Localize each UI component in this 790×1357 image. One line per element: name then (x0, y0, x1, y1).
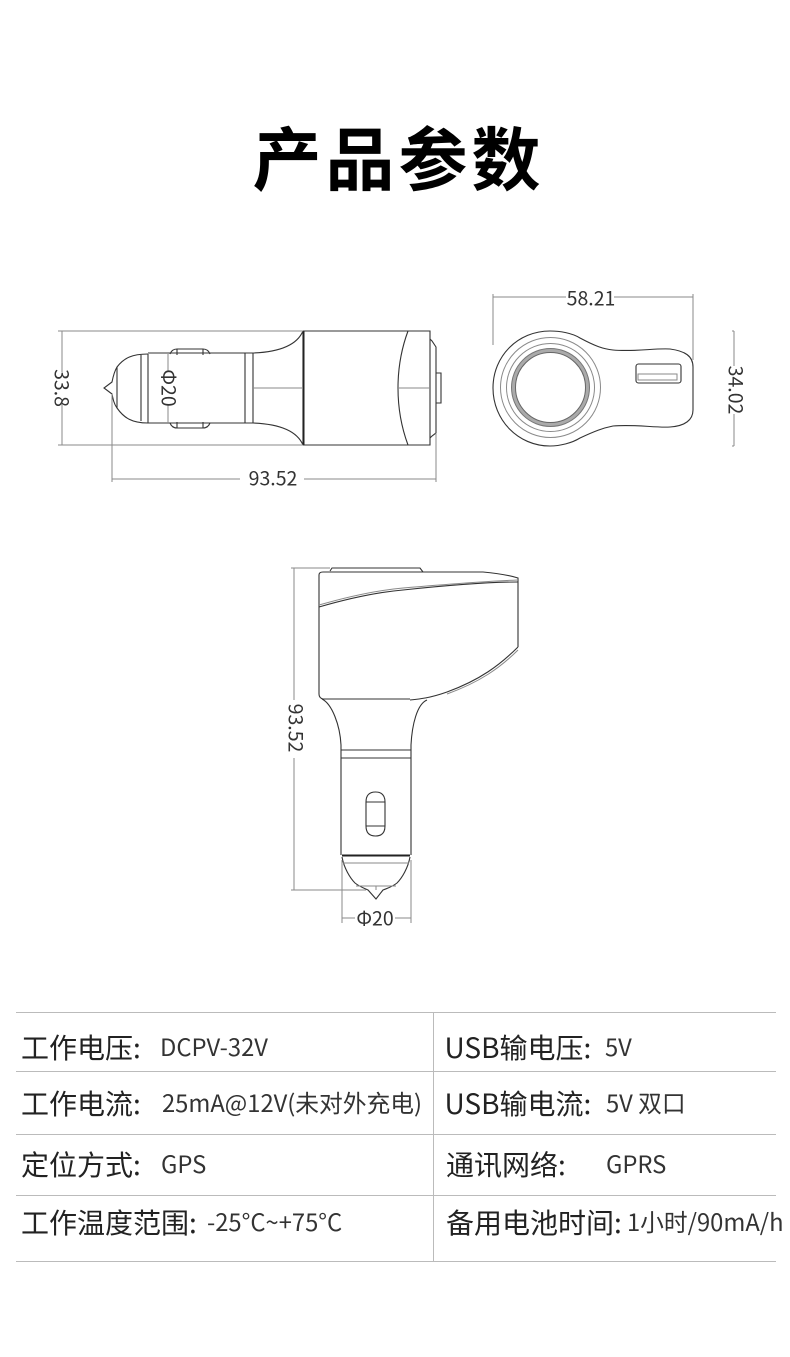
dimension label: height: 33.8 (48, 369, 78, 407)
spec: USB output current: 5V 双口 (606, 1084, 686, 1119)
spec: USB output current (444, 1083, 686, 1123)
spec: positioning method: GPS (161, 1145, 206, 1180)
spec: working current (21, 1083, 422, 1123)
spec: working current: 25mA@12V(未对外充电) (162, 1084, 422, 1119)
spec: working voltage: DCPV-32V (160, 1028, 268, 1063)
spec: backup battery time: 1小时/90mA/h (627, 1203, 784, 1238)
spec: USB output voltage: USB输电压: (444, 1027, 591, 1067)
top view diagram (493, 282, 752, 446)
top view dimension lines (493, 294, 734, 446)
spec: positioning method (21, 1144, 206, 1184)
dimension label: width: 58.21 (567, 282, 615, 312)
spec: USB output voltage: 5V (605, 1028, 632, 1063)
spec: working voltage: 工作电压: (21, 1027, 141, 1067)
front view outline (319, 568, 518, 899)
dimension label: diameter: Φ20 (156, 369, 184, 407)
side view dimension lines (58, 331, 436, 482)
spec: working temperature range (21, 1202, 342, 1242)
front view diagram (282, 568, 518, 932)
specification table (16, 1012, 784, 1262)
spec: communication network (446, 1144, 666, 1184)
top view outline (493, 331, 693, 446)
dimension label: diameter: Φ20 (356, 902, 394, 932)
side view outline (104, 331, 441, 445)
dimension label: length: 93.52 (249, 462, 297, 492)
front view dimension lines (291, 568, 411, 923)
spec: USB output current: USB输电流: (444, 1083, 591, 1123)
spec: working temperature range: 工作温度范围: (21, 1202, 197, 1242)
title: 产品参数 (252, 104, 544, 204)
spec: backup battery time: 备用电池时间: (446, 1202, 622, 1242)
spec: backup battery time (446, 1202, 784, 1242)
spec: working temperature range: -25°C~+75°C (207, 1203, 342, 1238)
side view diagram (48, 331, 441, 492)
spec: positioning method: 定位方式: (21, 1144, 141, 1184)
spec: working voltage (21, 1027, 268, 1067)
spec: working current: 工作电流: (21, 1083, 141, 1123)
spec: communication network: GPRS (606, 1145, 666, 1180)
spec: communication network: 通讯网络: (446, 1144, 566, 1184)
dimension label: length: 93.52 (282, 704, 312, 752)
dimension label: depth: 34.02 (722, 366, 752, 414)
